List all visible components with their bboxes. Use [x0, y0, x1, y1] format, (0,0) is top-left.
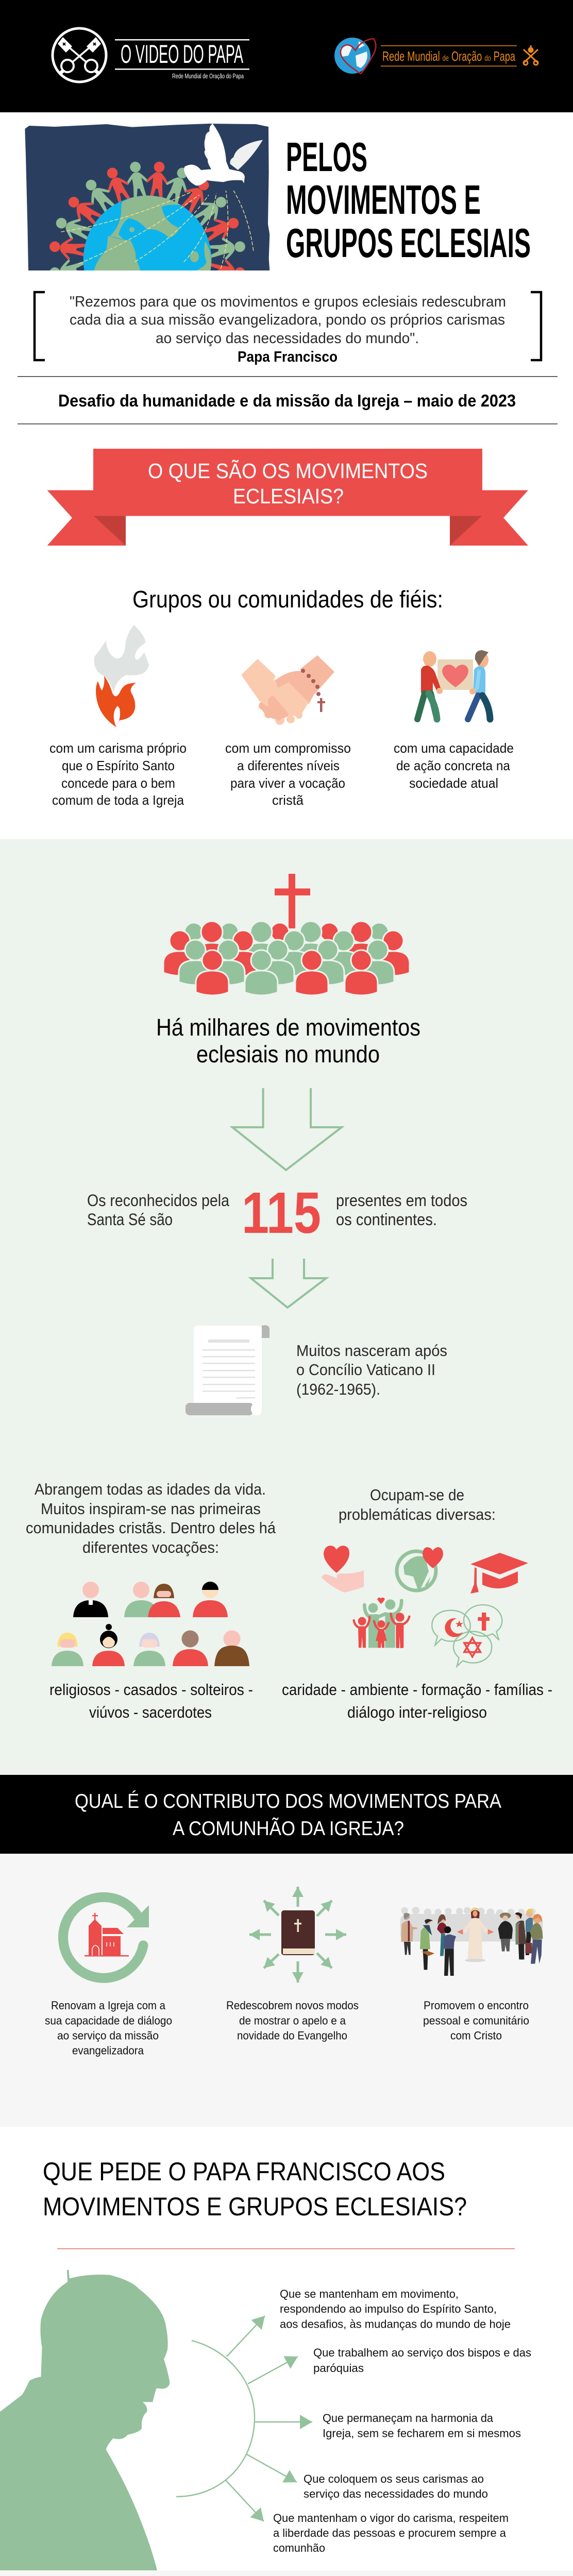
left group	[401, 1913, 456, 1976]
text: request 1: Que se mantenham em movimento,	[280, 2287, 459, 2300]
text: Promovem: com Cristo	[450, 2029, 502, 2042]
text: request 1: respondendo ao impulso do Espírito Santo,	[280, 2302, 497, 2315]
text: request 1: aos desafios, às mudanças do mundo de hoje	[280, 2317, 511, 2331]
icon: hand with heart	[322, 1546, 364, 1592]
text: Abrangem todas as idades	[26, 1480, 276, 1556]
illustration: Jesus among the crowd	[400, 1907, 543, 1976]
text: Concilio Vaticano II: (1962-1965).	[296, 1380, 380, 1398]
text: request 5	[273, 2512, 509, 2554]
text: compromisso: com um compromisso	[225, 740, 351, 756]
icon: interfaith speech bubbles	[432, 1605, 502, 1666]
text: Concilio Vaticano II: Muitos nasceram após	[296, 1342, 447, 1360]
text: request 2: paróquias	[313, 2362, 364, 2375]
priest	[73, 1582, 108, 1617]
text: Concilio Vaticano II	[296, 1342, 447, 1398]
text: compromisso: a diferentes níveis	[237, 758, 340, 773]
text: Ocupam-se: problemáticas diversas:	[339, 1505, 496, 1523]
diagram: arc with five arrows	[176, 2316, 312, 2521]
heading band: Qual e o contributo: QUAL É O CONTRIBUTO DOS MOVIMENTOS PARA	[75, 1790, 501, 1812]
heading band: Qual e o contributo	[0, 1775, 573, 1854]
blonde person	[52, 1633, 83, 1666]
older lavender person	[133, 1633, 165, 1666]
text: Redescobrem: de mostrar o apelo e a	[239, 2014, 346, 2027]
text: carisma: com um carisma próprio	[49, 740, 187, 756]
text: request 2: Que trabalhem ao serviço dos bispos e das	[313, 2346, 531, 2359]
illustration: people around the globe with dove	[25, 124, 270, 270]
text: presentes: presentes em todos	[336, 1191, 467, 1210]
text: compromisso	[225, 740, 351, 808]
text: Promovem: pessoal e comunitário	[423, 2014, 529, 2027]
icon: handshake with rosary	[241, 655, 334, 725]
woman with bun	[92, 1624, 125, 1666]
icon: dove and flame	[94, 625, 149, 727]
text: compromisso: para viver a vocação	[230, 775, 345, 791]
quote: Pope's prayer intention with brackets: "Rezemos para que os movimentos e grupos eclesiais redescubram	[70, 294, 506, 310]
text: Concilio Vaticano II: o Concílio Vaticano II	[296, 1361, 435, 1379]
text: capacidade: com uma capacidade	[394, 740, 514, 756]
text: Promovem	[423, 1999, 529, 2042]
third row	[170, 930, 403, 951]
quote: Pope's prayer intention with brackets	[35, 292, 541, 365]
front row	[202, 950, 372, 971]
title: PELOS	[286, 134, 367, 180]
text: carisma	[49, 740, 187, 808]
panel: pale green section	[0, 839, 573, 1775]
text: request 2	[313, 2346, 531, 2375]
text: vocations list: viúvos - sacerdotes	[89, 1703, 212, 1721]
text: Abrangem todas as idades: Abrangem todas as idades da vida.	[35, 1480, 266, 1498]
text: presentes	[336, 1191, 467, 1229]
text: Abrangem todas as idades: comunidades cristãs. Dentro deles há	[26, 1519, 276, 1537]
icon: graduation cap	[470, 1553, 528, 1594]
text: Renovam: sua capacidade de diálogo	[45, 2014, 172, 2027]
text: reconhecidos: Santa Sé são	[87, 1210, 173, 1229]
logo: Rede Mundial globe and heart	[334, 38, 376, 74]
heading: Ha milhares: eclesiais no mundo	[196, 1041, 380, 1067]
text: Promovem: Promovem o encontro	[424, 1999, 529, 2012]
ring of people	[48, 160, 247, 284]
text: request 3: Igreja, sem se fecharem em si mesmos	[323, 2427, 521, 2440]
arrow: small outline down	[251, 1259, 326, 1308]
icon: bible with radiating arrows	[249, 1887, 346, 1982]
logo text: Rede Mundial de Oracao do Papa: Rede Mundial de Oração do Papa	[382, 48, 515, 64]
text: request 4: Que coloquem os seus carismas ao	[304, 2472, 484, 2485]
header: black logo bar	[0, 0, 573, 112]
text: Ocupam-se: Ocupam-se de	[370, 1486, 464, 1504]
flight paths	[61, 191, 254, 269]
icon: document scroll	[186, 1325, 269, 1415]
icons: vocations people	[52, 1582, 249, 1666]
text: Renovam: evangelizadora	[72, 2044, 144, 2057]
text: request 1	[280, 2287, 511, 2331]
text: Abrangem todas as idades: diferentes vocações:	[82, 1538, 219, 1556]
panel: grey contribution section	[0, 1854, 573, 2127]
title	[286, 134, 531, 266]
icon: small orange keys	[524, 45, 538, 65]
quote: Pope's prayer intention with brackets: ao serviço das necessidades do mundo".	[156, 330, 419, 347]
text: reconhecidos	[87, 1191, 229, 1229]
text: request 5: comunhão	[273, 2541, 325, 2554]
friar	[214, 1630, 249, 1666]
number: 115: 115	[242, 1180, 321, 1245]
brown head person	[173, 1630, 208, 1666]
text: Renovam	[45, 1999, 172, 2057]
logo text: O Video do Papa: O VIDEO DO PAPA	[121, 40, 243, 69]
icon: family	[354, 1598, 409, 1648]
text: capacidade: sociedade atual	[409, 775, 498, 791]
illustration: Pope silhouette	[0, 2270, 170, 2570]
text: compromisso: cristã	[272, 792, 304, 808]
text: capacidade: de ação concreta na	[396, 758, 510, 773]
text: request 5: Que mantenham o vigor do carisma, respeitem	[273, 2512, 509, 2524]
text: carisma: comum de toda a Igreja	[52, 792, 184, 808]
text: vocations list: religiosos - casados - solteiros -	[49, 1681, 253, 1699]
icon: two people carrying a heart box	[417, 650, 490, 719]
banner: O que sao os movimentos eclesiais: ECLESIAIS?	[233, 484, 344, 508]
heading: Que pede o Papa Francisco: MOVIMENTOS E GRUPOS ECLESIAIS?	[43, 2192, 467, 2221]
heading: Ha milhares: Há milhares de movimentos	[156, 1014, 420, 1041]
text: presentes: os continentes.	[336, 1210, 437, 1229]
heading: Grupos ou comunidades: Grupos ou comunidades de fiéis:	[132, 586, 443, 613]
second row	[185, 940, 388, 960]
logo text: O Video do Papa	[115, 39, 249, 80]
icon: globe with heart	[397, 1547, 443, 1591]
banner: O que sao os movimentos eclesiais: O QUE SÃO OS MOVIMENTOS	[148, 459, 428, 483]
icons: issues	[322, 1546, 528, 1666]
arrow: large outline down	[232, 1088, 342, 1170]
banner: O que sao os movimentos eclesiais	[47, 449, 528, 546]
text: request 5: a liberdade das pessoas e procurem sempre a	[273, 2527, 507, 2539]
quote: Pope's prayer intention with brackets: Papa Francisco	[238, 349, 338, 365]
Jesus	[457, 1907, 494, 1962]
text: Abrangem todas as idades: Muitos inspiram-se nas primeiras	[41, 1500, 261, 1518]
text: request 3: Que permaneçam na harmonia da	[323, 2412, 494, 2425]
text: Redescobrem	[226, 1999, 359, 2042]
text: Redescobrem: novidade do Evangelho	[237, 2029, 347, 2042]
text: request 4	[304, 2472, 488, 2500]
grey background crowd	[400, 1907, 543, 1941]
heading: Ha milhares	[156, 1014, 420, 1067]
text: Renovam: Renovam a Igreja com a	[51, 1999, 165, 2012]
married couple	[124, 1582, 180, 1617]
globe	[82, 195, 213, 274]
heading: Que pede o Papa Francisco	[43, 2157, 467, 2221]
text: request 4: serviço das necessidades do mundo	[304, 2487, 488, 2500]
text: issues list	[282, 1681, 552, 1721]
subtitle between rules: Desafio da humanidade e da missão da Igreja – maio de 2023	[58, 391, 516, 410]
text: issues list: diálogo inter-religioso	[347, 1703, 487, 1721]
text: carisma: que o Espírito Santo	[62, 758, 175, 773]
text: carisma: concede para o bem	[61, 775, 175, 791]
logo text: O Video do Papa: Rede Mundial de Oração do Papa	[172, 72, 244, 80]
heading band: Qual e o contributo: A COMUNHÃO DA IGREJA?	[173, 1818, 404, 1840]
icon: church in circular arrow	[63, 1897, 149, 1978]
right group	[498, 1909, 543, 1964]
text: request 3	[323, 2412, 521, 2440]
panel: closing quote	[0, 2570, 573, 2576]
text: Ocupam-se	[339, 1486, 496, 1523]
single person	[193, 1582, 228, 1617]
text: capacidade	[394, 740, 514, 791]
text: vocations list	[49, 1681, 253, 1721]
quote: Pope's prayer intention with brackets: cada dia a sua missão evangelizadora, pondo os próprios carismas	[70, 312, 505, 328]
back row	[163, 921, 410, 995]
logo: O Video do Papa keys	[53, 28, 106, 82]
text: reconhecidos: Os reconhecidos pela	[87, 1191, 229, 1210]
icon: crowd under cross	[163, 874, 410, 995]
text: Redescobrem: Redescobrem novos modos	[226, 1999, 359, 2012]
text: Renovam: ao serviço da missão	[57, 2029, 159, 2042]
heading: Que pede o Papa Francisco: QUE PEDE O PAPA FRANCISCO AOS	[43, 2157, 445, 2186]
dove	[184, 124, 263, 185]
